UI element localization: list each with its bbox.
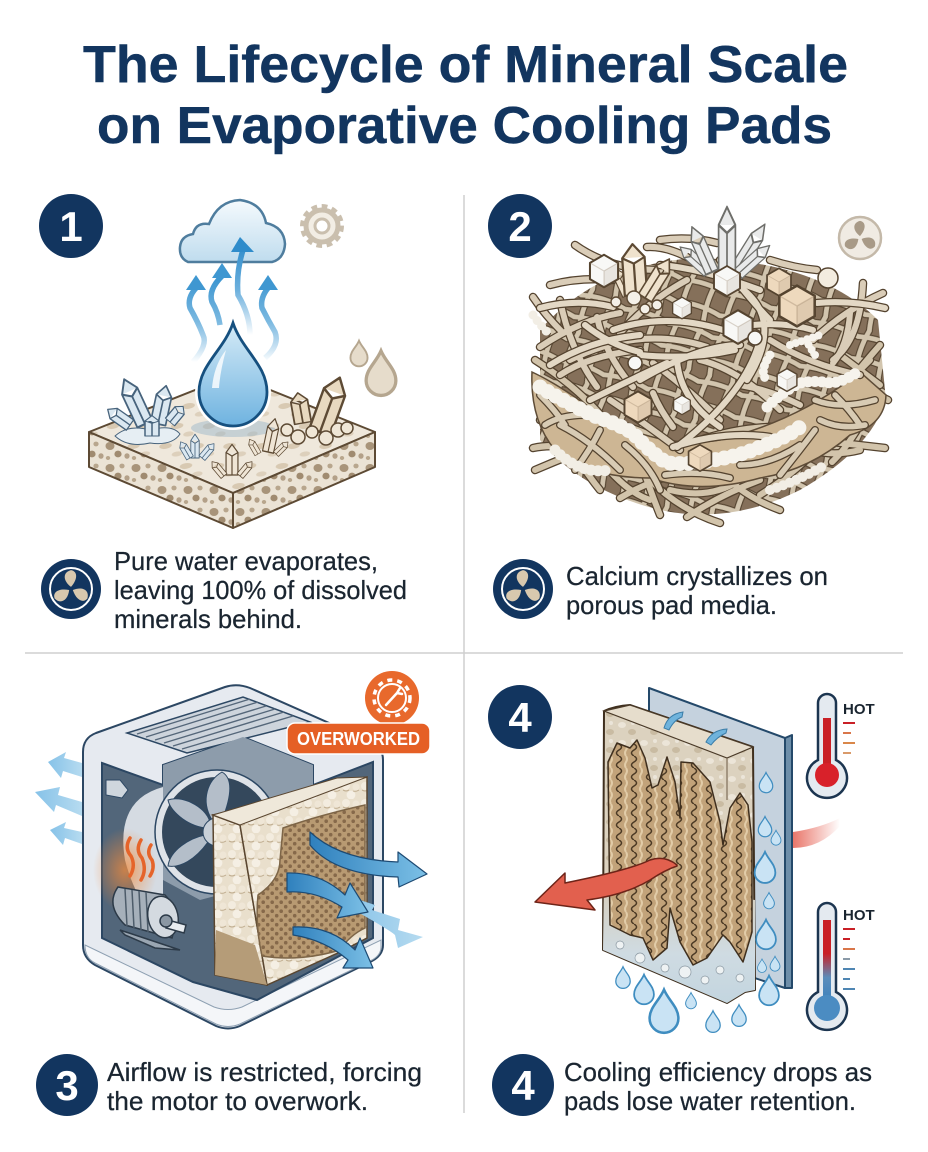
text block: step 2 caption: porous pad media. bbox=[566, 590, 777, 620]
cavity bbox=[102, 737, 373, 1000]
text block: step 3 caption: the motor to overwork. bbox=[107, 1086, 368, 1116]
arrow: warm air through pad bbox=[535, 858, 677, 910]
crystals: tan spikes bbox=[611, 243, 676, 314]
pad block bbox=[89, 375, 375, 528]
step badge 4 lower: 4 bbox=[511, 1062, 535, 1109]
icon: fan badge bbox=[493, 559, 553, 619]
overworked badge bbox=[287, 671, 430, 754]
step badge 3: 3 bbox=[55, 1062, 79, 1109]
icon: cooling thermometer bbox=[807, 903, 875, 1030]
cooler housing bbox=[83, 685, 383, 1028]
text block: step 3 caption: Airflow is restricted, forcing bbox=[107, 1057, 422, 1087]
heat trail bbox=[793, 818, 840, 848]
panel: step 4 failing pad bbox=[535, 688, 875, 1033]
icon: mineral drops bbox=[350, 341, 396, 395]
step badge 4: 4 bbox=[508, 694, 532, 741]
icon: fan badge bbox=[41, 559, 101, 619]
crystals: tan cluster bbox=[281, 374, 353, 445]
step badge 1 bbox=[39, 194, 103, 258]
text block: step 1 caption: minerals behind. bbox=[114, 604, 302, 634]
title bbox=[83, 36, 848, 155]
base lip bbox=[85, 940, 381, 1026]
text block: step 1 caption: leaving 100% of dissolved bbox=[114, 575, 407, 605]
title: The Lifecycle of Mineral Scale bbox=[83, 36, 848, 94]
step badge 1: 1 bbox=[59, 203, 83, 250]
corrugated channels bbox=[608, 740, 752, 965]
motor bbox=[113, 887, 186, 950]
fan shroud bbox=[123, 787, 163, 930]
icon: gear bbox=[303, 207, 341, 245]
frost lumps bbox=[616, 941, 744, 984]
lower fibres over scale bbox=[540, 395, 875, 490]
text block: step 4 caption bbox=[492, 1054, 872, 1116]
clogged pad bbox=[213, 777, 367, 985]
step badge 2: 2 bbox=[508, 203, 532, 250]
heat glow bbox=[93, 828, 157, 912]
bracket bbox=[106, 780, 128, 798]
text block: step 1 caption: Pure water evaporates, bbox=[114, 546, 378, 576]
icon: hot thermometer bbox=[807, 694, 875, 798]
arrows: airflow through pad bbox=[287, 832, 427, 968]
backing plate bbox=[649, 688, 792, 988]
water inlets bbox=[664, 712, 727, 745]
step badge 4 bbox=[488, 685, 552, 749]
pad corner line bbox=[726, 758, 728, 800]
arrows: exhaust air bbox=[35, 752, 82, 845]
honeycomb media bbox=[257, 805, 365, 958]
frost band bbox=[603, 880, 755, 1003]
text block: step 2 caption bbox=[493, 559, 828, 620]
white mineral crust bbox=[533, 315, 860, 490]
top grille bbox=[127, 697, 310, 753]
text block: step 1 caption bbox=[41, 546, 407, 634]
icon: fan bbox=[839, 217, 881, 259]
rising vapour arrows bbox=[189, 250, 276, 362]
crystals: cubes bbox=[590, 255, 838, 471]
icon: cloud bbox=[180, 200, 285, 262]
crystals: clear spikes bbox=[676, 207, 774, 278]
text block: step 4 caption: Cooling efficiency drops as bbox=[564, 1057, 872, 1087]
fibre mass base bbox=[540, 258, 886, 514]
icon: hot thermometer: HOT bbox=[843, 701, 875, 718]
panel: step 3 cooler unit bbox=[35, 671, 430, 1028]
step badge 3 bbox=[36, 1054, 98, 1116]
crystals: small clusters bbox=[177, 418, 290, 478]
crystals: blue cluster bbox=[104, 376, 188, 444]
pad top edge bbox=[604, 705, 753, 758]
icon: water drop bbox=[191, 323, 275, 437]
title: on Evaporative Cooling Pads bbox=[97, 97, 832, 155]
pad body bbox=[603, 705, 755, 1003]
fan bbox=[155, 770, 279, 894]
middle fibres bbox=[533, 239, 885, 450]
panel: step 2 pad media fibres bbox=[532, 207, 888, 523]
overworked badge: OVERWORKED bbox=[297, 729, 420, 749]
text block: step 2 caption: Calcium crystallizes on bbox=[566, 561, 828, 591]
panel: step 1 evaporation bbox=[39, 194, 396, 528]
text block: step 3 caption bbox=[36, 1054, 422, 1116]
water droplets bbox=[616, 772, 781, 1033]
icon: cooling thermometer: HOT bbox=[843, 907, 875, 924]
step badge 4 lower bbox=[492, 1054, 554, 1116]
step badge 2 bbox=[488, 194, 552, 258]
back fibres bbox=[533, 345, 888, 523]
text block: step 4 caption: pads lose water retention. bbox=[564, 1086, 856, 1116]
icon: heat flames bbox=[127, 838, 153, 880]
scale body bbox=[532, 372, 886, 486]
